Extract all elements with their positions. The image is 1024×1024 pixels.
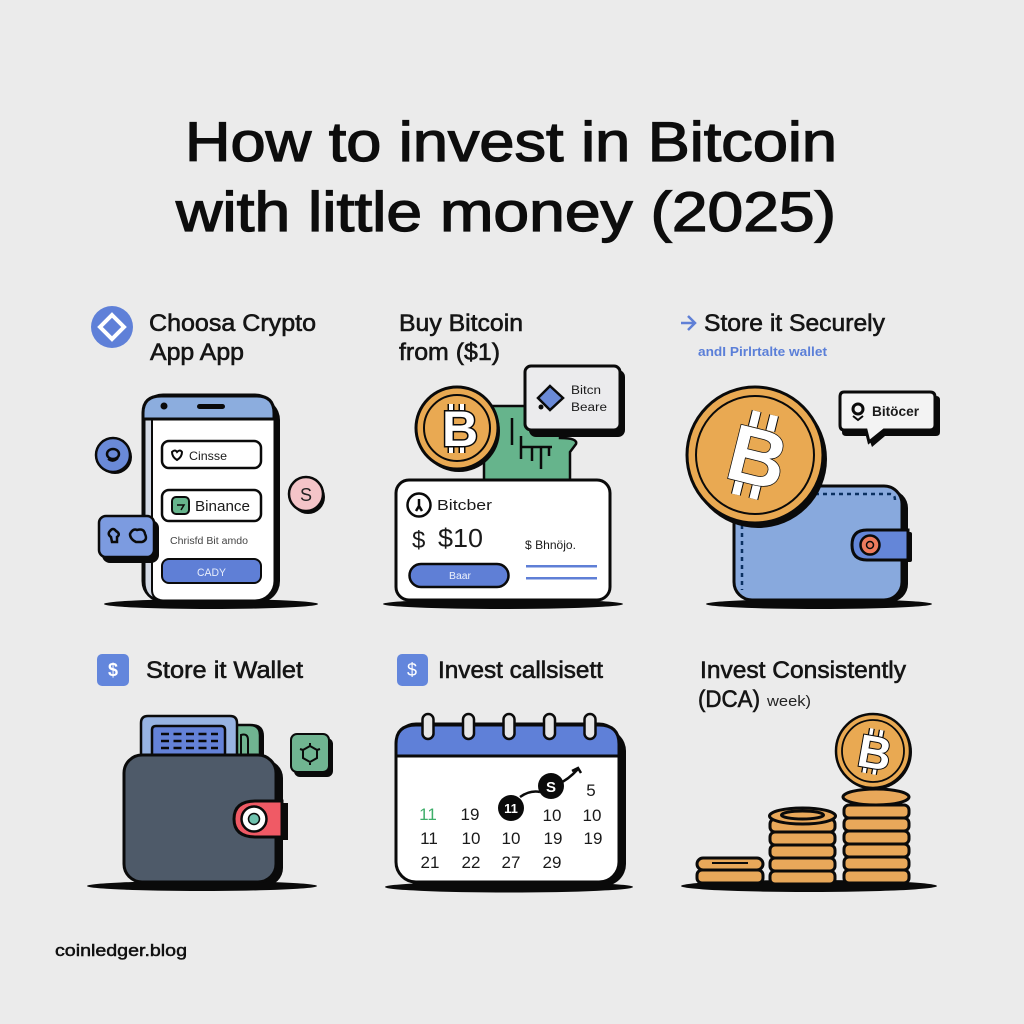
amount: [412, 523, 483, 554]
ground shadow: [104, 599, 318, 609]
icon: dollar tile: [397, 654, 428, 686]
title: [175, 110, 837, 243]
calendar numbers: 19: [584, 829, 602, 848]
calendar numbers: 11: [419, 805, 437, 824]
step heading: buy bitcoin: Buy Bitcoin: [399, 310, 523, 337]
calendar numbers: 21: [421, 853, 439, 872]
wallet clasp: [852, 530, 912, 562]
button: CADY: [162, 559, 261, 583]
calendar numbers: 19: [461, 805, 479, 824]
speech bubble: Bitöcer: [872, 403, 920, 419]
bitcoin coin on stack: B: [854, 724, 896, 781]
coin stack tall: [843, 789, 909, 883]
wallet: [734, 486, 912, 602]
step heading: invest consistently: (DCA): [698, 686, 760, 713]
buy button: [410, 564, 508, 587]
ground shadow: [706, 599, 932, 609]
title: with little money (2025): [175, 180, 836, 243]
calendar: [396, 714, 626, 886]
calendar numbers: 11: [420, 829, 438, 848]
amount: $10: [438, 523, 483, 553]
coin stack small: [697, 858, 763, 883]
icon: dollar tile: [97, 654, 129, 686]
step heading: choose crypto app: App App: [150, 339, 244, 366]
icon: blue floating coin: [96, 438, 132, 474]
purchase card: [396, 480, 610, 600]
icon: dollar tile: $: [108, 660, 118, 680]
label card: Bitcn Beare: [525, 366, 625, 437]
bitcoin coin large: B: [719, 407, 796, 507]
subheading: andI Pirlrtalte wallet: [698, 345, 828, 359]
panel: buy bitcoin: [383, 310, 625, 609]
ground shadow: [87, 881, 317, 891]
panel: store it wallet: [87, 654, 333, 891]
button: Binance: Binance: [195, 498, 250, 515]
bitcoin coin large: [687, 387, 827, 528]
step heading: store securely: Store it Securely: [704, 310, 885, 337]
wallet clasp: [234, 801, 288, 840]
calendar numbers: [419, 781, 602, 872]
icon: dollar tile: $: [407, 660, 417, 680]
icon: blue app tile: [99, 516, 159, 563]
bitcoin coin: B: [442, 401, 478, 457]
buy button: Baar: [449, 571, 472, 582]
step heading: store wallet: Store it Wallet: [146, 657, 303, 684]
calendar numbers: 22: [462, 853, 480, 872]
panel: store it securely: [681, 310, 940, 609]
blue card in wallet: [141, 716, 237, 758]
step heading: invest consistently: week): [766, 693, 811, 710]
label card: Bitcn Beare: Beare: [571, 402, 607, 414]
button: Binance: [162, 490, 261, 521]
calendar numbers: 10: [583, 806, 601, 825]
phone illustration: [143, 395, 280, 603]
panel: invest calendar: [385, 654, 633, 892]
panel: invest consistently: [681, 657, 937, 892]
calendar numbers: 10: [502, 829, 520, 848]
footer source: coinledger.blog: [55, 942, 187, 960]
card brand row: [408, 494, 492, 516]
green note behind wallet: [235, 724, 264, 758]
icon: blue diamond badge: [91, 306, 133, 348]
calendar numbers: 10: [462, 829, 480, 848]
button: Cinsse: [162, 441, 261, 468]
marked dates: S: [546, 779, 556, 796]
step heading: invest: Invest callsisett: [438, 657, 603, 684]
calendar numbers: 27: [502, 853, 520, 872]
button: CADY: CADY: [197, 567, 227, 579]
card brand row: Bitcber: [437, 497, 492, 514]
ground shadow: [385, 882, 633, 892]
ground shadow: [383, 599, 623, 609]
bitcoin coin: [416, 387, 500, 472]
coin stack medium: [770, 808, 836, 884]
icon: arrow: [681, 316, 695, 330]
calendar numbers: 29: [543, 853, 561, 872]
amount: $: [412, 527, 425, 554]
banknote: [484, 406, 576, 482]
step heading: invest consistently: [698, 657, 906, 713]
step heading: choose crypto app: Choosa Crypto: [149, 310, 316, 337]
marked dates: [498, 768, 581, 821]
small caption: Chrisfd Bit amdo: [170, 536, 248, 547]
icon: pink floating coin: [289, 477, 325, 514]
speech bubble: [840, 392, 940, 447]
calendar numbers: 5: [586, 781, 596, 800]
calendar rings: [422, 714, 596, 739]
side label: $ Bhnöjo.: [525, 538, 576, 552]
ground shadow: [681, 880, 937, 892]
step heading: buy bitcoin: [399, 310, 523, 366]
dark wallet: [124, 755, 288, 886]
step heading: buy bitcoin: from ($1): [399, 339, 500, 366]
calendar numbers: 19: [544, 829, 562, 848]
title: How to invest in Bitcoin: [185, 110, 837, 173]
label card: Bitcn Beare: Bitcn: [571, 385, 601, 397]
icon: green tile: [291, 734, 333, 777]
calendar numbers: 10: [543, 806, 561, 825]
icon: pink floating coin: S: [300, 485, 312, 505]
button: Cinsse: Cinsse: [189, 449, 227, 463]
marked dates: 11: [504, 801, 518, 816]
step heading: choose crypto app: [149, 310, 316, 366]
panel: choose crypto app: [91, 306, 325, 609]
step heading: invest consistently: Invest Consistently: [700, 657, 906, 684]
bitcoin coin on stack: [836, 714, 912, 790]
